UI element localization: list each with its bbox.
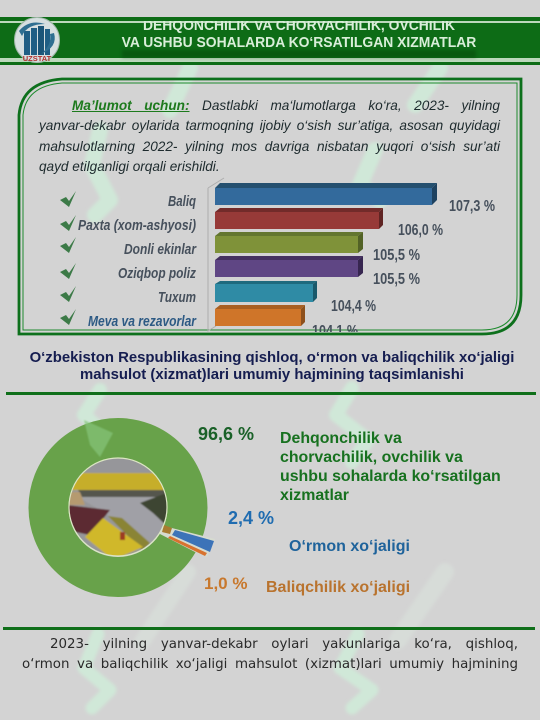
legend: agriculture: ushbu sohalarda ko‘rsatilgan (280, 468, 501, 485)
bar chart: Tuxum (158, 290, 196, 306)
bar chart: Oziqbop poliz (118, 266, 197, 282)
bar chart: Paxta (xom-ashyosi) (78, 218, 196, 234)
legend: forestry: O‘rmon xo‘jaligi (289, 538, 410, 555)
section heading (30, 350, 514, 383)
bar chart: Donli ekinlar (124, 242, 197, 258)
header band (0, 17, 540, 65)
legend: agriculture: chorvachilik, ovchilik va (280, 449, 463, 466)
check marks (60, 191, 76, 325)
donut chart (28, 418, 214, 597)
bar values: 105,5 % (373, 271, 420, 288)
bar chart (60, 178, 495, 332)
section heading: mahsulot (xizmat)lari umumiy hajmining taqsimlanishi (80, 367, 464, 383)
bar values: 107,3 % (449, 198, 495, 215)
footer text: 2023- yilning yanvar-dekabr oylari yakunlariga ko‘ra, qishloq, (50, 637, 518, 652)
divider (6, 392, 536, 395)
info text: yanvar-dekabr oylarida tarmoqning ijobiy o‘sish sur’atiga, asosan quyidagi (39, 118, 500, 133)
bar chart: Meva va rezavorlar (88, 314, 197, 330)
info panel frame (18, 78, 522, 336)
logo: UZSTAT: UZSTAT (23, 54, 52, 63)
donut value 2,4: 2,4 % (228, 508, 274, 528)
bar values: 106,0 % (398, 222, 443, 239)
legend: agriculture: Dehqonchilik va (280, 430, 402, 447)
section heading: O‘zbekiston Respublikasining qishloq, o‘rmon va baliqchilik xo‘jaligi (30, 350, 514, 366)
divider (3, 627, 535, 630)
bar values (312, 198, 495, 340)
header title: VA USHBU SOHALARDA KO‘RSATILGAN XIZMATLAR (122, 34, 476, 50)
footer text: o‘rmon va baliqchilik xo‘jaligi mahsulot (xizmat)lari umumiy hajmining (22, 657, 518, 672)
bar chart: Baliq (168, 194, 196, 210)
donut value 1,0: 1,0 % (204, 574, 247, 593)
bar values: 104,4 % (331, 298, 376, 315)
legend: agriculture: xizmatlar (280, 487, 349, 504)
info text: Ma’lumot uchun: Dastlabki ma‘lumotlarga ko‘ra, 2023- yilning (72, 98, 500, 113)
donut value 96,6: 96,6 % (198, 424, 254, 444)
legend: agriculture (280, 430, 501, 504)
bar values: 105,5 % (373, 247, 420, 264)
footer text (22, 637, 518, 672)
center photo (70, 458, 166, 556)
header title (122, 21, 476, 50)
info text (38, 98, 500, 174)
legend: fishery: Baliqchilik xo‘jaligi (266, 579, 410, 596)
bars (215, 183, 437, 326)
info text: qayd etilganligi orqali erishildi. (39, 159, 220, 174)
info text: mahsulotlarning 2022- yilning mos davriga nisbatan yuqori o‘sish sur’ati (39, 139, 500, 154)
logo: UZSTAT (14, 17, 60, 63)
